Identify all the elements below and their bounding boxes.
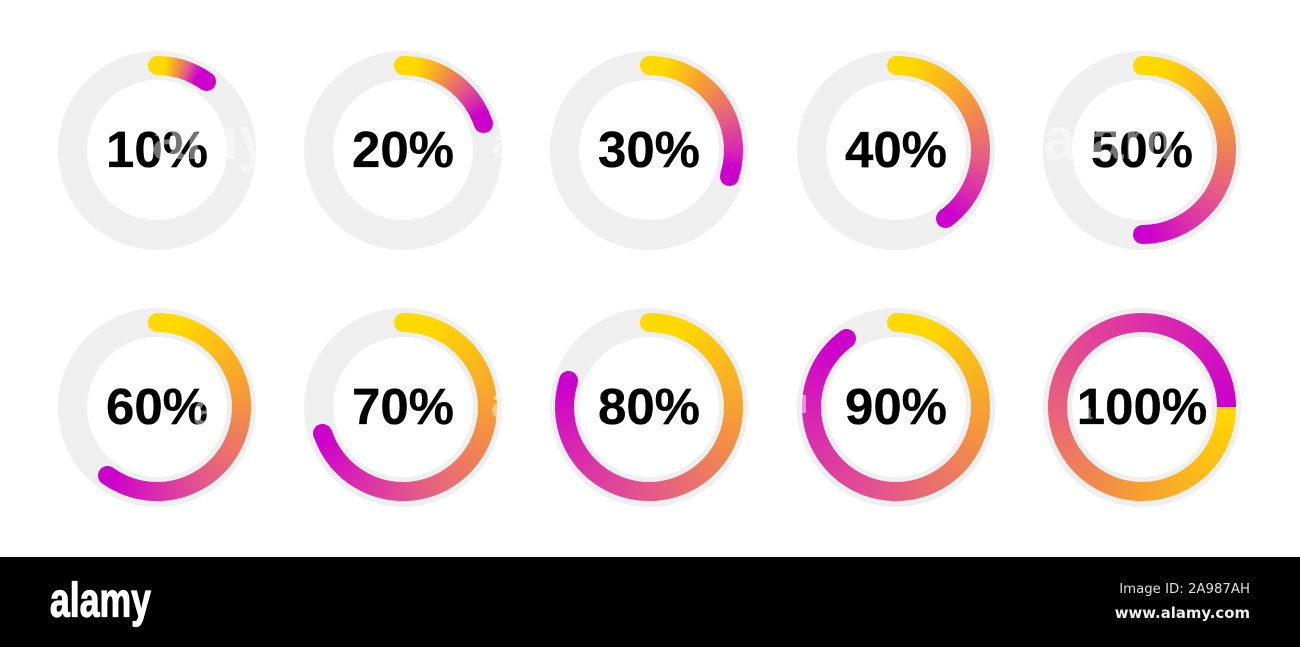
arc: 40% — [802, 56, 990, 244]
label: 80%: 80% — [598, 378, 700, 435]
image id: Image ID: 2A987AH — [1119, 582, 1250, 597]
label: 100%: 100% — [1077, 378, 1207, 435]
ring: 60%: a — [193, 384, 218, 435]
arc: 80% — [555, 313, 743, 501]
label: 70%: 70% — [352, 378, 454, 435]
text: a — [492, 116, 517, 167]
label: 50%: 50% — [1091, 121, 1193, 178]
label: 20%: 20% — [352, 121, 454, 178]
ring: 60% — [58, 308, 256, 507]
label: 90%: 90% — [845, 378, 947, 435]
ring: 40% — [797, 51, 995, 250]
arc: 100% — [1048, 313, 1236, 501]
label: 30%: 30% — [598, 121, 700, 178]
website: www.alamy.com — [1115, 604, 1250, 622]
arc: 30% — [555, 56, 743, 244]
label: 10%: 10% — [106, 121, 208, 178]
label: 60%: 60% — [106, 378, 208, 435]
arc: 90% — [802, 313, 990, 501]
ring: 50% — [1043, 51, 1241, 250]
text: a — [491, 376, 516, 427]
arc: 50% — [1048, 56, 1236, 244]
arc: 70% — [309, 313, 497, 501]
ring: 20% — [304, 51, 517, 250]
arc: 60% — [63, 313, 251, 501]
ring: 90% — [797, 308, 995, 507]
ring: 100% — [1043, 308, 1241, 507]
arc: 10% — [63, 56, 251, 244]
footer bar — [0, 557, 1300, 647]
ring: 80% — [550, 308, 748, 507]
ring: 10%: amy — [152, 105, 272, 172]
arc: 20% — [309, 56, 497, 244]
label: 40%: 40% — [845, 121, 947, 178]
ring: 50%: alam — [1043, 107, 1175, 172]
ring: 30% — [550, 51, 748, 250]
ring: 70% — [304, 308, 516, 507]
ring: 100%: a — [1080, 399, 1092, 424]
ring: 10% — [58, 51, 272, 250]
